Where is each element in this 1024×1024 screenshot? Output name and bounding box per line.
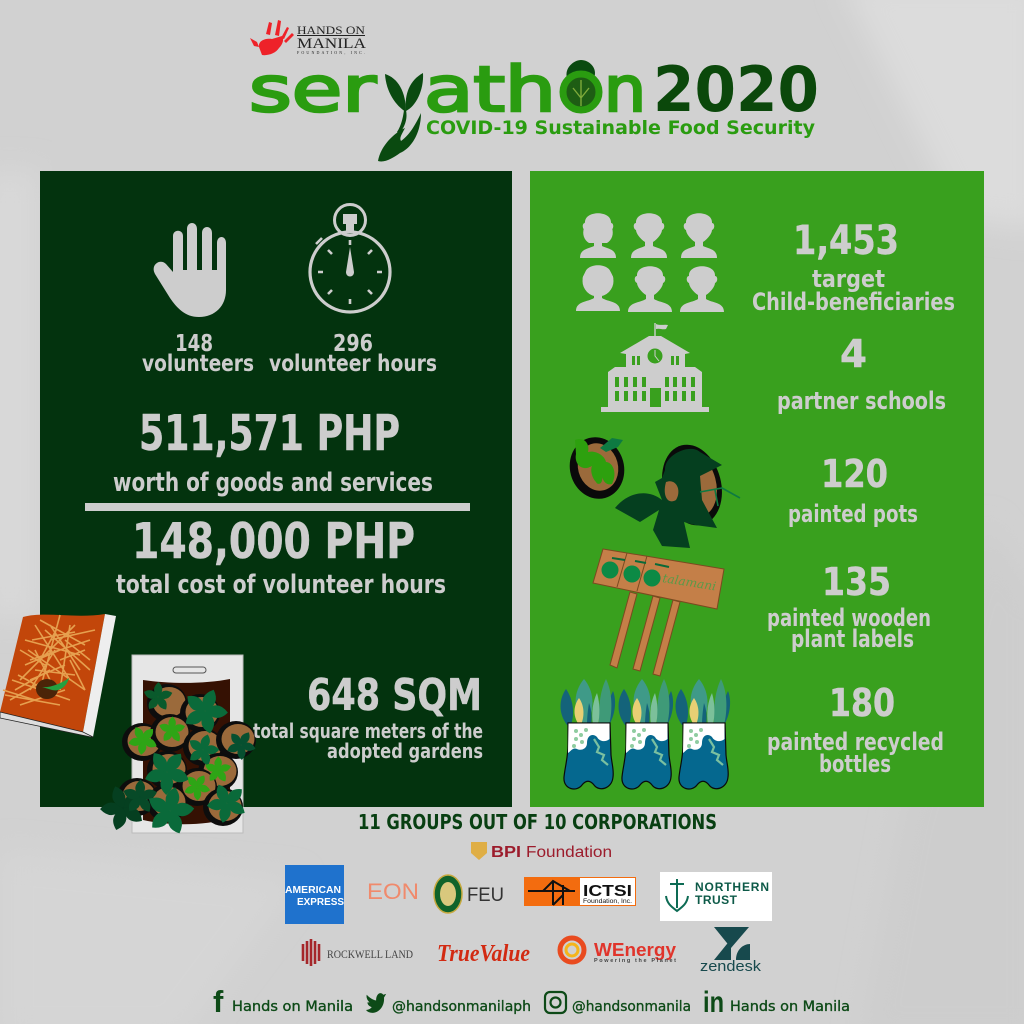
stat: cost of volunteer hours: 148,000 PHP <box>132 513 415 570</box>
panel: left volunteers panel background <box>40 171 512 807</box>
logo: servathon wordmark: ath <box>424 53 556 126</box>
illustration: painted wooden plant labels <box>593 549 724 676</box>
logo: year 2020: 2020 <box>653 53 819 126</box>
stat: 180 recycled bottles: painted recycled <box>767 728 944 756</box>
stat: 1,453 target beneficiaries: target <box>812 265 885 293</box>
stat: cost of volunteer hours: total cost of volunteer hours <box>116 570 446 600</box>
logo: servathon wordmark <box>249 53 646 161</box>
stat: 1,453 target beneficiaries: 1,453 <box>793 218 899 264</box>
wordmark HANDS ON MANILA <box>297 25 366 56</box>
logo: American Express: EXPRESS <box>297 896 344 908</box>
icon: facebook: f <box>213 984 224 1019</box>
logo: American Express <box>285 865 344 924</box>
stat: 148 volunteers: volunteers <box>142 351 254 377</box>
illustration: mulch book <box>0 614 116 737</box>
stat: 180 recycled bottles: 180 <box>829 681 895 725</box>
stat: 1,453 target beneficiaries <box>752 218 955 316</box>
logo: Zendesk <box>700 927 762 975</box>
subtitle: COVID-19 Sustainable Food Security <box>426 117 816 139</box>
logo: American Express: AMERICAN <box>285 884 341 896</box>
logo: servathon wordmark: n <box>604 53 646 126</box>
stat: goods and services worth: 511,571 PHP <box>139 405 400 462</box>
stat: 135 plant labels: painted wooden <box>767 604 931 632</box>
logo: BPI Foundation: Foundation <box>526 844 612 861</box>
stat: 135 plant labels: 135 <box>822 560 891 604</box>
divider bar <box>85 503 470 511</box>
illustration: painted pots <box>563 431 740 548</box>
illustration: painted wooden plant labels: talamani <box>662 571 717 593</box>
text: linkedin handle: Hands on Manila <box>730 999 850 1015</box>
stat: 648 SQM gardens: adopted gardens <box>327 739 483 763</box>
logo: BPI Foundation <box>471 842 612 861</box>
stat: goods and services worth <box>113 405 433 498</box>
sponsor logos <box>285 842 772 975</box>
stat: 1,453 target beneficiaries: Child-beneficiaries <box>752 288 955 316</box>
text: instagram handle: @handsonmanila <box>572 999 691 1015</box>
icon: leaf in o <box>563 60 599 110</box>
logo: BPI Foundation: BPI <box>491 844 521 861</box>
wordmark HANDS ON MANILA: FOUNDATION, INC. <box>297 50 365 56</box>
icon: red hand print <box>250 20 294 55</box>
stat: 296 volunteer hours <box>269 331 437 377</box>
stat: 296 volunteer hours: volunteer hours <box>269 351 437 377</box>
stat: 120 painted pots <box>788 452 918 528</box>
icon: instagram <box>545 992 566 1013</box>
stat: 120 painted pots: 120 <box>821 452 888 496</box>
logo: Northern Trust: TRUST <box>695 893 738 907</box>
logo: ICTSI Foundation <box>524 877 636 906</box>
logo: WEnergy: WEnergy <box>594 940 676 960</box>
logo: FEU <box>434 875 504 913</box>
logo: Rockwell Land <box>303 939 413 966</box>
stat: 4 partner schools: partner schools <box>777 387 946 415</box>
stat: 180 recycled bottles: bottles <box>819 750 891 778</box>
stat: 135 plant labels: plant labels <box>791 625 914 653</box>
stat: 296 volunteer hours: 296 <box>333 331 373 357</box>
logo: servathon wordmark: ser <box>249 53 377 126</box>
icon: stopwatch <box>310 204 390 312</box>
stat: cost of volunteer hours <box>116 513 446 600</box>
text: facebook handle: Hands on Manila <box>232 999 353 1015</box>
Hands on Manila logo <box>250 20 366 56</box>
wordmark HANDS ON MANILA: MANILA <box>297 36 366 52</box>
stat: 148 volunteers: 148 <box>175 331 213 357</box>
social media footer <box>213 984 850 1019</box>
panel: right outputs panel background <box>530 171 984 807</box>
stat: 135 plant labels <box>767 560 931 653</box>
logo: Rockwell Land: ROCKWELL LAND <box>327 947 413 961</box>
stat: 648 SQM gardens: 648 SQM <box>307 670 482 721</box>
stat: 180 recycled bottles <box>767 681 944 778</box>
stat: 648 SQM gardens: total square meters of the <box>253 719 483 743</box>
logo: Zendesk: zendesk <box>700 958 762 975</box>
logo: Northern Trust: NORTHERN <box>695 880 769 894</box>
logo: WEnergy: Powering the Planet <box>594 958 676 964</box>
stat: goods and services worth: worth of goods and services <box>113 468 433 498</box>
stat: 120 painted pots: painted pots <box>788 500 918 528</box>
icon: school building <box>601 323 709 412</box>
icon: raised hand <box>154 223 226 317</box>
illustration: painted recycled bottles <box>560 679 730 789</box>
icon: linkedin: in <box>703 986 724 1019</box>
stat: 4 partner schools: 4 <box>840 332 867 376</box>
icon: twitter <box>366 993 386 1013</box>
logo: True Value: TrueValue <box>437 941 530 967</box>
logo: ICTSI Foundation: Foundation, Inc. <box>583 899 632 905</box>
stat: 4 partner schools <box>777 332 946 415</box>
wordmark HANDS ON MANILA: HANDS ON <box>297 25 366 37</box>
logo: EON: EON <box>367 879 419 904</box>
icon: sprout and hand forming y <box>378 73 423 161</box>
logo: FEU: FEU <box>467 885 504 906</box>
logo: Northern Trust <box>660 872 772 921</box>
header logo block <box>249 20 819 161</box>
logo: ICTSI Foundation: ICTSI <box>583 883 632 900</box>
stat: 148 volunteers <box>142 331 254 377</box>
text: twitter handle: @handsonmanilaph <box>392 999 531 1015</box>
icon group: six child silhouettes <box>576 213 724 312</box>
illustration: garden tray with potted plants <box>90 655 262 841</box>
stat: 648 SQM gardens <box>253 670 483 763</box>
logo: WEnergy <box>560 938 676 964</box>
heading: corporations: 11 GROUPS OUT OF 10 CORPORATIONS <box>358 810 717 834</box>
